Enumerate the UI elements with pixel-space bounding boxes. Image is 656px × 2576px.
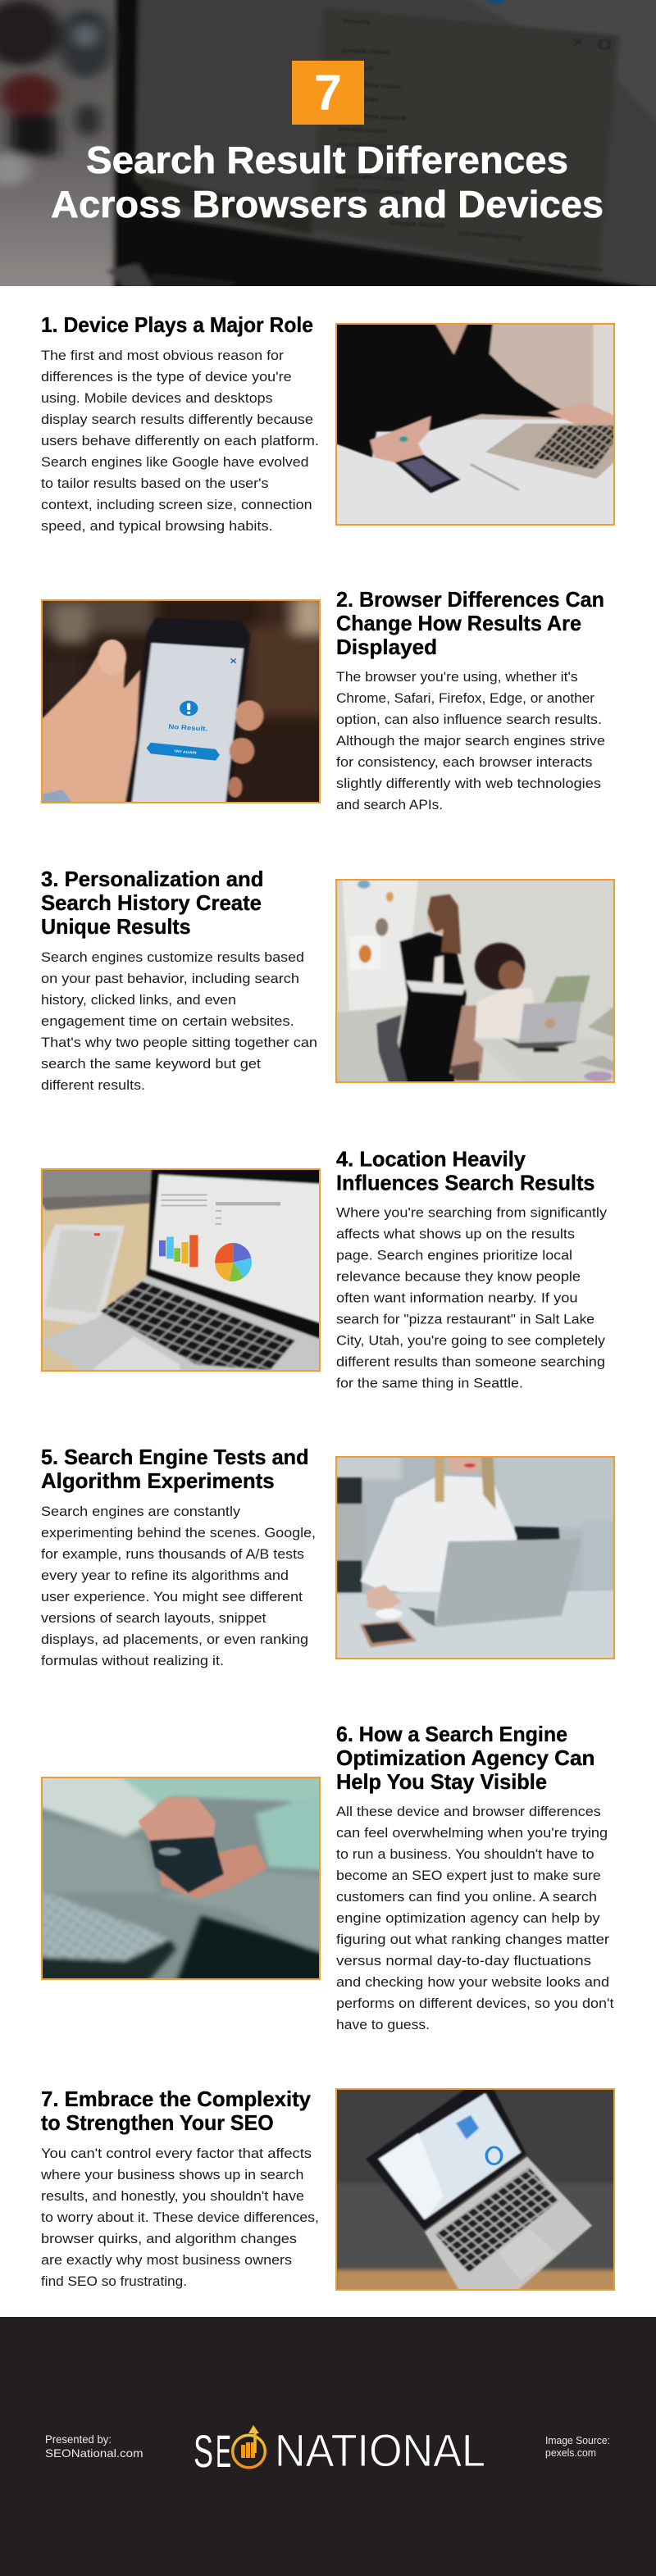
body text 2: option, can also influence search results. [336, 712, 602, 727]
body text 2: The browser you're using, whether it's [336, 669, 578, 685]
heading 7 [41, 2087, 312, 2135]
image source: Image Source: [545, 2434, 610, 2446]
body text 4 [336, 1205, 608, 1390]
heading 6: 6. How a Search Engine [336, 1722, 567, 1746]
title [51, 139, 604, 225]
heading 2: Displayed [336, 635, 437, 659]
body text 7: browser quirks, and algorithm changes [41, 2231, 297, 2246]
number badge: 7 [314, 65, 342, 121]
logo: SEO National: NATIONAL [275, 2424, 485, 2476]
body text 6: to run a business. You shouldn't have to [336, 1846, 594, 1862]
heading 3: 3. Personalization and [41, 867, 263, 891]
body text 4: often want information nearby. If you [336, 1290, 578, 1305]
body text 2: for consistency, each browser interacts [336, 754, 592, 770]
section 4: location [38, 1146, 608, 1390]
body text 2 [336, 669, 605, 812]
body text 1: display search results differently because [41, 412, 313, 427]
body text 4: relevance because they know people [336, 1269, 581, 1284]
body text 6: customers can find you online. A search [336, 1889, 597, 1905]
section 2: browser [38, 587, 605, 812]
hero banner [0, 0, 656, 289]
section 7: complexity [40, 2086, 619, 2293]
body text 5: formulas without realizing it. [41, 1653, 224, 1668]
logo: SEO National [194, 2424, 485, 2477]
heading 4: Influences Search Results [336, 1171, 595, 1195]
heading 2 [336, 587, 604, 659]
heading 6: Help You Stay Visible [336, 1769, 547, 1794]
image source [545, 2434, 610, 2459]
heading 6 [336, 1722, 595, 1794]
faint search suggestions: pexels stock video [335, 172, 404, 182]
body text 3: Search engines customize results based [41, 949, 304, 965]
hero background photo: laptop with search box [0, 0, 656, 286]
faint search suggestions: pexels music [338, 125, 388, 134]
photo: laptop and tablet with charts [38, 1166, 326, 1375]
photo: woman with phone and laptop [326, 316, 627, 526]
heading 3: Unique Results [41, 914, 191, 939]
body text 3 [41, 949, 317, 1093]
body text 6: versus normal day-to-day fluctuations [336, 1953, 591, 1968]
body text 5 [41, 1504, 316, 1668]
body text 3: history, clicked links, and even [41, 992, 236, 1008]
heading 7: to Strengthen Your SEO [41, 2110, 274, 2135]
body text 1: context, including screen size, connection [41, 497, 312, 512]
body text 5: displays, ad placements, or even ranking [41, 1632, 308, 1647]
faint search suggestions: Google Search [389, 220, 445, 229]
section 5: tests [41, 1445, 619, 1668]
faint search suggestions: free [364, 96, 379, 103]
body text 4: affects what shows up on the results [336, 1227, 575, 1241]
faint search suggestions: free video [364, 82, 401, 89]
image source: pexels.com [545, 2446, 596, 2459]
body text 3: different results. [41, 1077, 145, 1093]
heading 7: 7. Embrace the Complexity [41, 2087, 312, 2111]
body text 4: Where you're searching from significantly [336, 1205, 608, 1220]
presented by: Presented by: [45, 2433, 112, 2446]
photo: laptop on dark surface, top view [335, 2086, 619, 2293]
photo: hand holding phone with no result screen: No Result. [168, 723, 208, 732]
body text 5: user experience. You might see different [41, 1589, 303, 1604]
heading 6: Optimization Agency Can [336, 1745, 595, 1770]
body text 6: performs on different devices, so you don't [336, 1996, 614, 2011]
body text 7: find SEO so frustrating. [41, 2273, 187, 2289]
faint search suggestions: free photos [364, 113, 406, 121]
body text 6: and checking how your website looks and [336, 1974, 609, 1990]
presented by [45, 2433, 143, 2460]
faint search suggestions: Report inappropriate predictions [508, 259, 604, 272]
icon: orange O with bar chart and arrow [233, 2425, 265, 2468]
faint search suggestions: X [573, 38, 583, 48]
heading 5: Algorithm Experiments [41, 1468, 275, 1493]
body text 5: experimenting behind the scenes. Google, [41, 1525, 316, 1541]
body text 4: different results than someone searching [336, 1354, 605, 1369]
body text 1: users behave differently on each platform. [41, 433, 319, 448]
body text 3: search the same keyword but get [41, 1056, 261, 1072]
body text 2: Chrome, Safari, Firefox, Edge, or another [336, 690, 594, 706]
section 3: personalization [41, 867, 615, 1093]
body text 6: can feel overwhelming when you're trying [336, 1825, 608, 1841]
body text 5: versions of search layouts, snippet [41, 1610, 266, 1626]
body text 4: search for "pizza restaurant" in Salt Lake [336, 1312, 594, 1327]
body text 1: differences is the type of device you're [41, 369, 292, 385]
body text 6: have to guess. [336, 2017, 430, 2032]
body text 2: slightly differently with web technologies [336, 776, 601, 791]
body text 7 [40, 2146, 319, 2289]
faint search suggestions: pexels images [337, 141, 391, 149]
faint search suggestions: Pexels [344, 18, 369, 25]
faint search suggestions: pexels video [342, 47, 390, 55]
body text 7: are exactly why most business owners [41, 2252, 292, 2268]
photo: two women at table with laptop [335, 877, 615, 1084]
body text 6: become an SEO expert just to make sure [336, 1868, 601, 1883]
body text 7: to worry about it. These device differences, [41, 2210, 319, 2225]
body text 6: All these device and browser differences [336, 1804, 601, 1819]
body text 1: speed, and typical browsing habits. [41, 518, 273, 534]
section 6: agency [38, 1722, 614, 2032]
heading 3: Search History Create [41, 890, 262, 915]
body text 1 [41, 348, 319, 534]
number badge [292, 61, 364, 125]
body text 3: engagement time on certain websites. [41, 1013, 294, 1029]
body text 7: You can't control every factor that affects [41, 2146, 312, 2161]
photo: hand holding phone with no result screen: TRY AGAIN [174, 749, 197, 754]
logo: SEO National: S [194, 2425, 213, 2477]
body text 7: where your business shows up in search [40, 2167, 303, 2182]
body text 2: Although the major search engines strive [336, 733, 605, 749]
heading 2: Change How Results Are [336, 611, 581, 635]
logo: SEO National: E [216, 2425, 231, 2477]
body text 1: The first and most obvious reason for [41, 348, 284, 363]
heading 1: 1. Device Plays a Major Role [41, 312, 313, 337]
photo: woman in white blouse with laptop [330, 1453, 619, 1664]
photo: hand holding phone with no result screen: ✕ [230, 658, 237, 666]
section 1: device [41, 312, 627, 534]
body text 4: for the same thing in Seattle. [336, 1376, 523, 1390]
body text 1: Search engines like Google have evolved [41, 454, 308, 470]
footer band [0, 2317, 656, 2576]
body text 1: to tailor results based on the user's [41, 476, 269, 491]
heading 4 [336, 1146, 595, 1195]
faint search suggestions: uk [365, 65, 375, 71]
heading 4: 4. Location Heavily [336, 1146, 526, 1171]
title: Search Result Differences [86, 139, 568, 181]
body text 3: on your past behavior, including search [41, 971, 299, 986]
body text 5: Search engines are constantly [41, 1504, 241, 1519]
heading 5 [41, 1445, 308, 1493]
title: Across Browsers and Devices [51, 183, 604, 225]
heading 2: 2. Browser Differences Can [336, 587, 604, 612]
body text 4: page. Search engines prioritize local [336, 1248, 572, 1263]
body text 3: That's why two people sitting together can [41, 1035, 317, 1050]
presented by: SEONational.com [45, 2446, 143, 2460]
body text 5: every year to refine its algorithms and [41, 1568, 289, 1583]
body text 6: figuring out what ranking changes matter [336, 1932, 609, 1947]
photo: hands holding phone over laptop, blurred [38, 1774, 326, 1983]
photo: hand holding phone with no result screen [38, 595, 326, 806]
faint search suggestions [335, 18, 609, 272]
faint search suggestions: pexels alternatives [335, 186, 404, 195]
body text 7: results, and honestly, you shouldn't have [41, 2188, 304, 2204]
faint search suggestions: I'm Feeling Lucky [458, 230, 524, 240]
body text 6: engine optimization agency can help by [336, 1910, 600, 1926]
body text 6 [336, 1804, 614, 2032]
body text 5: for example, runs thousands of A/B tests [41, 1546, 304, 1562]
body text 2: and search APIs. [336, 797, 443, 812]
body text 1: using. Mobile devices and desktops [41, 390, 273, 406]
heading 3 [41, 867, 263, 939]
body text 4: City, Utah, you're going to see completely [336, 1333, 606, 1348]
heading 5: 5. Search Engine Tests and [41, 1445, 308, 1469]
